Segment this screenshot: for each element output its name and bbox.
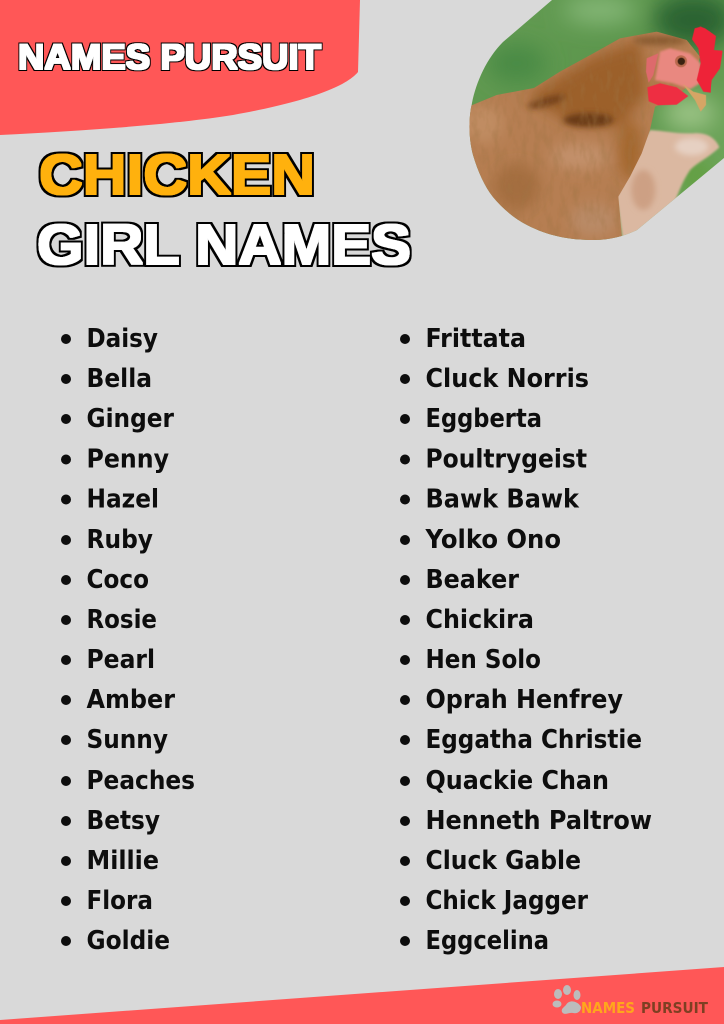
- ear lobe: [646, 53, 658, 83]
- names list: right column: Quackie Chan: [426, 766, 609, 796]
- title: chicken: CHICKEN: [39, 143, 315, 207]
- photo: hen: [457, 0, 724, 253]
- title: girl names: GIRL NAMES: [37, 213, 411, 277]
- head: [655, 48, 701, 89]
- names list: left column: Coco: [86, 565, 149, 595]
- top banner: [0, 0, 360, 135]
- eye: [675, 55, 687, 67]
- body: [457, 27, 710, 253]
- names list: left column: Bella: [86, 364, 152, 394]
- names list: right column: Eggcelina: [426, 926, 549, 956]
- names list: right column: Chick Jagger: [426, 886, 588, 916]
- footer logo: [552, 985, 709, 1017]
- names list: right column: Chickira: [426, 605, 534, 635]
- names list: right column: Cluck Norris: [426, 364, 589, 394]
- names list: left column: Penny: [86, 444, 169, 474]
- icon: paw: [552, 985, 581, 1014]
- names list: right column: Henneth Paltrow: [426, 806, 652, 836]
- rear feathers: [617, 130, 719, 243]
- names list: right column: Bawk Bawk: [426, 484, 580, 514]
- names list: right column: Beaker: [426, 565, 519, 595]
- names list: right column: Poultrygeist: [426, 444, 587, 474]
- bottom banner: [0, 967, 724, 1024]
- names list: right column: Eggatha Christie: [426, 725, 642, 755]
- footer logo: PURSUIT: [641, 999, 709, 1017]
- comb: [692, 27, 723, 93]
- names list: right column: Cluck Gable: [426, 846, 581, 876]
- names list: left column: Peaches: [86, 766, 195, 796]
- names list: left column: Betsy: [86, 806, 160, 836]
- names list: left column: Ruby: [86, 525, 153, 555]
- names list: left column: [61, 324, 195, 956]
- names list: right column: Yolko Ono: [425, 525, 561, 555]
- names list: right column: Hen Solo: [426, 645, 541, 675]
- names list: right column: Frittata: [426, 324, 526, 354]
- wattle: [647, 83, 688, 105]
- names list: left column: Pearl: [86, 645, 155, 675]
- footer logo: NAMES: [581, 999, 635, 1017]
- names list: left column: Rosie: [86, 605, 157, 635]
- names list: left column: Hazel: [86, 484, 159, 514]
- names list: right column: Eggberta: [426, 404, 542, 434]
- brand heading: NAMES PURSUIT: [18, 38, 321, 77]
- beak: [683, 84, 706, 112]
- names list: right column: Oprah Henfrey: [426, 685, 623, 715]
- names list: left column: Ginger: [86, 404, 174, 434]
- names list: left column: Millie: [86, 846, 159, 876]
- names list: left column: Sunny: [86, 725, 168, 755]
- names list: left column: Daisy: [86, 324, 158, 354]
- names list: left column: Goldie: [86, 926, 170, 956]
- names list: left column: Amber: [86, 685, 175, 715]
- names list: right column: [400, 324, 652, 956]
- names list: left column: Flora: [86, 886, 153, 916]
